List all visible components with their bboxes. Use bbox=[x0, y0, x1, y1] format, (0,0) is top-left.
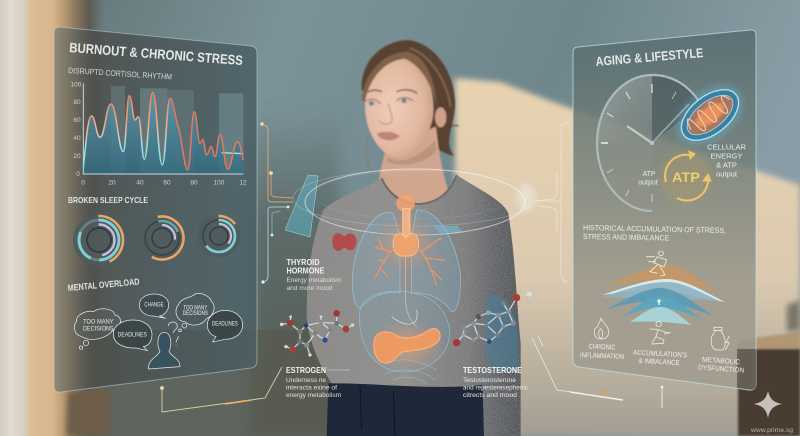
icon labels: ACCUMULATION'S bbox=[633, 350, 688, 359]
clock bbox=[597, 75, 700, 211]
thought bubbles and person: DEADLINES bbox=[212, 320, 238, 327]
lungs bbox=[352, 210, 460, 312]
line chart: cortisol rhythm: 20 bbox=[108, 180, 116, 186]
label: testosterone bbox=[463, 365, 529, 399]
line chart: cortisol rhythm: 60 bbox=[163, 180, 171, 186]
line chart: cortisol rhythm: 12 bbox=[239, 180, 247, 186]
label: testosterone: citrects and mood bbox=[463, 392, 517, 399]
thought bubbles and person: DECISIONS bbox=[183, 310, 208, 317]
ATP output label: ATP bbox=[642, 171, 656, 178]
icon labels: INFLAMMATION bbox=[580, 352, 624, 361]
molecule: right bbox=[453, 291, 532, 346]
line chart: cortisol rhythm: 0 bbox=[81, 180, 85, 186]
thought bubbles and person: CHANGE bbox=[144, 302, 164, 309]
line chart: cortisol rhythm bbox=[71, 82, 247, 186]
icon labels: DYSFUNCTION bbox=[698, 364, 744, 375]
molecule: left bbox=[280, 310, 354, 357]
mitochondrion label: output bbox=[716, 170, 738, 178]
label: thyroid hormone: Energy metabolism bbox=[286, 277, 342, 284]
icon: thyroid gland bbox=[332, 233, 356, 251]
thought bubbles and person: DEADLINES bbox=[118, 332, 147, 339]
icon: ATP cycle: ATP bbox=[672, 169, 700, 185]
icon: watermark star bbox=[754, 391, 782, 418]
label: estrogen: energy metabolism bbox=[286, 392, 341, 399]
sleep rings bbox=[73, 211, 240, 266]
layered mounds bbox=[602, 265, 725, 325]
panel glass bbox=[573, 30, 756, 390]
icon labels bbox=[580, 344, 744, 375]
icon: runner bbox=[646, 251, 667, 276]
label: testosterone: and repesteresephenic bbox=[463, 384, 529, 392]
trachea and thyroid bbox=[393, 195, 419, 256]
heading: BURNOUT & CHRONIC STRESS bbox=[69, 40, 243, 68]
subheading: accumulation: STRESS AND IMBALANCE bbox=[583, 232, 669, 243]
icon labels: METABOLIC bbox=[702, 357, 740, 366]
icon: kneeling figure bbox=[649, 321, 671, 344]
subheading: overload: MENTAL OVERLOAD bbox=[67, 276, 140, 293]
label: estrogen: interacta exine of bbox=[286, 384, 337, 392]
line chart: cortisol rhythm: 80 bbox=[73, 99, 81, 106]
icon labels: & IMBALANCE bbox=[638, 358, 680, 367]
line chart: cortisol rhythm: 80 bbox=[190, 180, 198, 186]
label: estrogen bbox=[286, 365, 350, 399]
subheading: sleep: BROKEN SLEEP CYCLE bbox=[68, 195, 148, 205]
icon: flame bbox=[594, 318, 609, 339]
subheading: cortisol: DISRUPTD CORTISOL RHYTHM bbox=[68, 66, 173, 82]
mitochondrion label bbox=[707, 142, 746, 178]
label: thyroid hormone: THYROID bbox=[286, 257, 320, 267]
ring 2 bbox=[135, 211, 189, 265]
mitochondrion label: ENERGY bbox=[711, 152, 742, 160]
anatomy hologram bbox=[280, 195, 532, 383]
sweater and trousers bbox=[307, 175, 521, 436]
watermark text: www.prime.sg bbox=[750, 427, 793, 434]
icon labels: CHRONIC bbox=[588, 344, 616, 351]
ring 1 bbox=[73, 214, 125, 266]
subheading: accumulation: HISTORICAL ACCUMULATION OF STRESS, bbox=[583, 223, 726, 235]
ATP output label: output bbox=[638, 180, 658, 186]
panel glass bbox=[54, 27, 257, 392]
holographic rings around the chest bbox=[285, 169, 537, 237]
connector lines bbox=[160, 122, 663, 412]
line chart: cortisol rhythm: 40 bbox=[73, 135, 81, 142]
line chart: cortisol rhythm: 60 bbox=[73, 117, 81, 124]
line chart: cortisol rhythm: 0 bbox=[76, 171, 80, 178]
hair, neck and face bbox=[362, 40, 459, 220]
pancreas bbox=[374, 329, 440, 363]
thought bubbles and person: DECISIONS bbox=[83, 325, 114, 332]
label: thyroid hormone: HORMONE bbox=[286, 266, 325, 276]
stomach and abdomen bbox=[360, 291, 450, 383]
subheading: accumulation bbox=[583, 223, 726, 243]
line chart: cortisol rhythm: 100 bbox=[214, 180, 225, 186]
bronchi bbox=[375, 238, 445, 285]
icon: mitochondrion bbox=[665, 72, 755, 158]
glow bbox=[375, 213, 438, 273]
label: estrogen: Underness ne bbox=[286, 377, 326, 384]
mitochondrion label: & ATP bbox=[716, 160, 737, 170]
label: thyroid hormone: and more mood bbox=[286, 285, 333, 292]
label: thyroid hormone bbox=[286, 257, 342, 292]
thought bubbles and person: TOO MANY bbox=[83, 319, 114, 326]
panel: aging and lifestyle bbox=[573, 30, 756, 390]
panel: burnout and chronic stress bbox=[54, 27, 257, 392]
heading: AGING & LIFESTYLE bbox=[595, 45, 704, 69]
woman figure bbox=[307, 40, 521, 436]
ATP output label bbox=[638, 171, 658, 186]
label: testosterone: TESTOSTERONE bbox=[463, 365, 522, 375]
line chart: cortisol rhythm: 40 bbox=[136, 180, 144, 186]
label: estrogen: ESTROGEN bbox=[286, 365, 326, 375]
thought bubbles and person bbox=[74, 293, 243, 369]
icon: ATP cycle bbox=[660, 151, 712, 203]
thought bubbles and person: TOO MANY bbox=[183, 304, 208, 311]
ring 3 bbox=[198, 214, 240, 258]
mitochondrion label: CELLULAR bbox=[707, 142, 746, 152]
line chart: cortisol rhythm: 100 bbox=[71, 82, 82, 88]
label: testosterone: Testosterosterone bbox=[463, 377, 516, 384]
line chart: cortisol rhythm: 20 bbox=[73, 153, 81, 160]
icon: jar with bolt bbox=[711, 327, 729, 350]
